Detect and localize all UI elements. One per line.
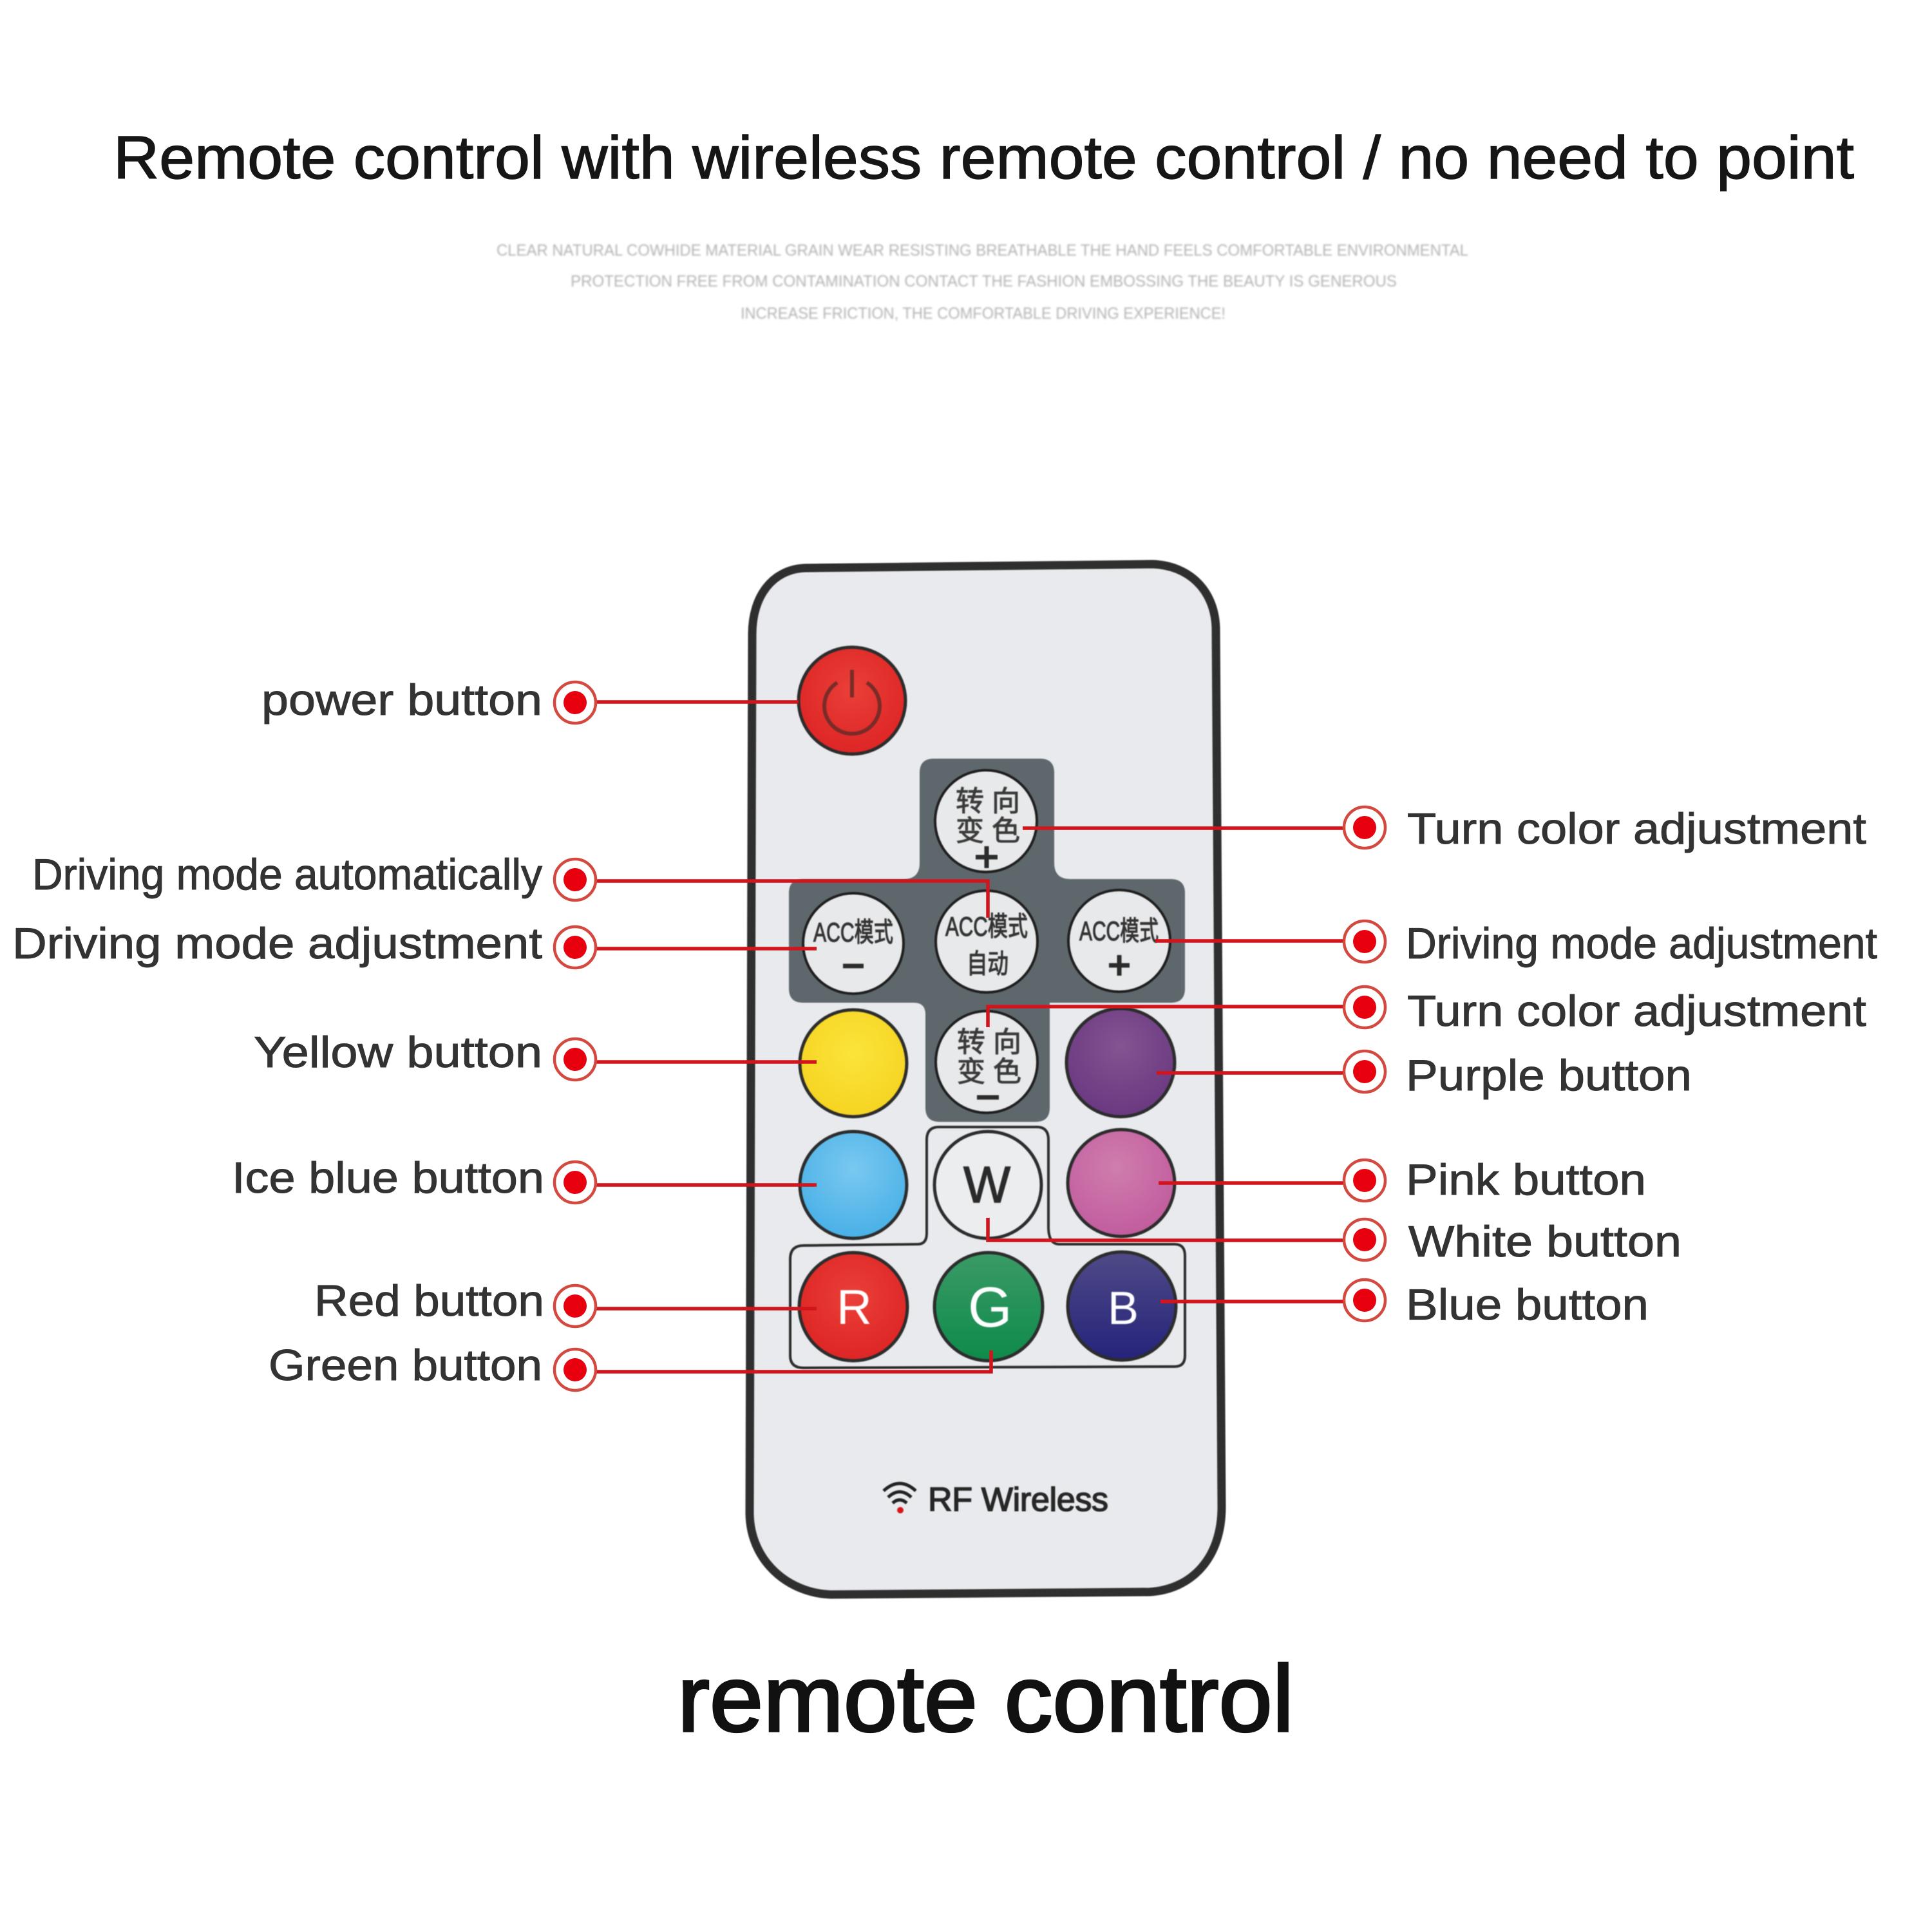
callout: purple button: Purple button xyxy=(1406,1051,1692,1100)
callout: turn color adjustment minus: Turn color adjustment xyxy=(1407,987,1866,1036)
ACC auto button: ACC模式 xyxy=(945,911,1028,942)
callout: blue button: Blue button xyxy=(1406,1280,1649,1329)
callout: driving mode adjustment left xyxy=(12,919,817,968)
callout: purple button xyxy=(1157,1051,1692,1100)
callout: driving mode adjustment right xyxy=(1155,919,1877,968)
purple button xyxy=(1066,1009,1175,1117)
left callouts xyxy=(12,676,991,1390)
white button xyxy=(934,1132,1041,1238)
ACC minus button xyxy=(803,893,904,994)
green button: G xyxy=(968,1275,1012,1339)
callout: green button: Green button xyxy=(269,1341,542,1390)
callout: power button: power button xyxy=(261,676,542,724)
callout: driving mode automatically: Driving mode automatically xyxy=(32,850,542,899)
blue button xyxy=(1068,1252,1176,1360)
faded description text xyxy=(497,242,1468,323)
callout: turn color adjustment plus: Turn color adjustment xyxy=(1407,804,1866,853)
icon: wifi signal xyxy=(884,1484,916,1513)
callout: pink button xyxy=(1159,1155,1646,1204)
yellow button xyxy=(800,1010,907,1117)
faded description text: CLEAR NATURAL COWHIDE MATERIAL GRAIN WEAR RESISTING BREATHABLE THE HAND FEELS COMFORTABLE ENVIRONMENTAL xyxy=(497,242,1468,260)
turn color plus button: 转向 xyxy=(956,786,1020,817)
pink button xyxy=(1068,1130,1175,1236)
ACC auto button: 自动 xyxy=(967,949,1009,979)
callout: ice blue button xyxy=(232,1153,817,1203)
callout: driving mode automatically xyxy=(32,850,988,918)
ACC plus button xyxy=(1068,890,1170,992)
callout: driving mode adjustment right: Driving mode adjustment xyxy=(1406,919,1877,968)
grey cross plate xyxy=(789,759,1185,1122)
red button xyxy=(799,1253,907,1361)
callout: blue button xyxy=(1160,1280,1649,1329)
right callouts xyxy=(988,804,1877,1329)
turn color plus button: 变色 xyxy=(956,815,1020,847)
callout: red button: Red button xyxy=(314,1276,544,1325)
turn color minus button xyxy=(936,1011,1037,1113)
callout: pink button: Pink button xyxy=(1406,1155,1646,1204)
ACC plus button: ACC模式 xyxy=(1079,916,1159,946)
callout: white button: White button xyxy=(1408,1217,1681,1266)
callout: turn color adjustment plus xyxy=(1023,804,1866,853)
button group outline xyxy=(790,1127,1185,1368)
callout: power button xyxy=(261,676,799,724)
faded description text: INCREASE FRICTION, THE COMFORTABLE DRIVING EXPERIENCE! xyxy=(741,305,1226,323)
blue button: B xyxy=(1108,1283,1139,1334)
ice blue button xyxy=(800,1132,907,1238)
RF Wireless label: RF Wireless xyxy=(928,1481,1108,1519)
callout: turn color adjustment minus xyxy=(988,987,1866,1036)
ACC auto button xyxy=(936,891,1037,992)
red button: R xyxy=(837,1280,872,1335)
remote control device xyxy=(750,564,1222,1595)
green button xyxy=(934,1253,1043,1361)
callout: yellow button xyxy=(254,1028,817,1080)
faded description text: PROTECTION FREE FROM CONTAMINATION CONTACT THE FASHION EMBOSSING THE BEAUTY IS GENEROUS xyxy=(571,272,1397,290)
callout: yellow button: Yellow button xyxy=(254,1028,542,1077)
bottom caption: remote control xyxy=(677,1646,1294,1751)
power button xyxy=(799,647,905,754)
callout: white button xyxy=(988,1217,1681,1266)
title: Remote control with wireless remote control / no need to point xyxy=(113,124,1854,191)
callout: red button xyxy=(314,1276,817,1327)
turn color minus button: 变色 xyxy=(957,1056,1021,1088)
callout: driving mode adjustment left: Driving mode adjustment xyxy=(12,919,542,968)
white button: W xyxy=(963,1156,1010,1213)
callout: green button xyxy=(269,1341,991,1390)
ACC minus button: ACC模式 xyxy=(813,917,893,947)
turn color plus button xyxy=(935,770,1037,872)
callout: ice blue button: Ice blue button xyxy=(232,1153,544,1202)
turn color minus button: 转向 xyxy=(957,1027,1021,1058)
remote body xyxy=(750,564,1222,1595)
